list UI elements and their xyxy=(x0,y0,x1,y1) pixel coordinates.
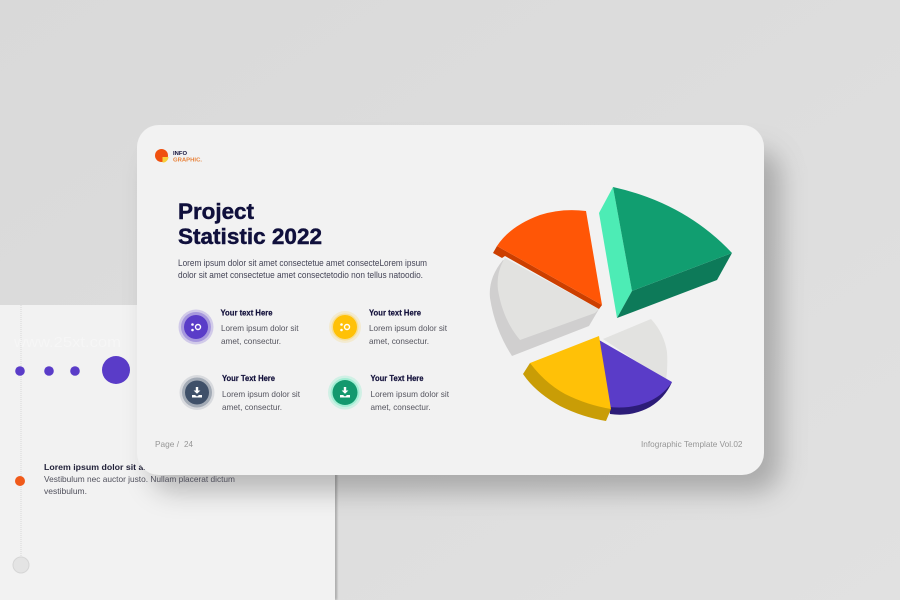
icon: green download xyxy=(328,376,362,410)
slice: green xyxy=(599,187,732,318)
item: yellow: Lorem ipsum dolor sit xyxy=(369,323,448,333)
card shadow xyxy=(150,150,780,492)
item: green: amet, consectur. xyxy=(370,402,430,412)
panel: main card xyxy=(137,125,764,475)
logo: GRAPHIC. xyxy=(173,158,203,164)
timeline description: vestibulum. xyxy=(44,486,87,496)
item: yellow: amet, consectur. xyxy=(369,336,429,346)
icon: purple gears xyxy=(178,310,214,344)
page number xyxy=(155,439,193,449)
item: green xyxy=(328,374,450,412)
slice: yellow xyxy=(523,336,611,421)
item: slate: Lorem ipsum dolor sit xyxy=(222,389,301,399)
item: green: Your Text Here xyxy=(370,374,424,383)
timeline marker orange xyxy=(15,476,25,486)
page number: Page / xyxy=(155,439,180,449)
item: yellow xyxy=(329,308,448,346)
icon: slate download xyxy=(180,375,214,410)
intro text: dolor sit amet consectetue amet consectetodio non tellus natoodio. xyxy=(178,270,423,280)
item: slate: Your Text Here xyxy=(222,374,276,383)
item: green: Lorem ipsum dolor sit xyxy=(370,389,450,399)
template label: Infographic Template Vol.02 xyxy=(641,439,743,449)
title: Project xyxy=(178,199,255,224)
title xyxy=(178,199,322,249)
item: purple: Your text Here xyxy=(220,308,273,318)
timeline description: Vestibulum nec auctor justo. Nullam placerat dictum xyxy=(44,474,235,484)
slice: grey right xyxy=(603,319,667,381)
intro text: Lorem ipsum dolor sit amet consectetue amet consecteLorem ipsum xyxy=(178,258,427,268)
item: purple: Lorem ipsum dolor sit xyxy=(221,323,299,333)
slice: purple xyxy=(599,340,672,415)
logo: INFO xyxy=(173,151,188,157)
timeline heading: Lorem ipsum dolor sit amet xyxy=(44,462,159,472)
item: yellow: Your text Here xyxy=(369,308,422,318)
panel: background slide xyxy=(0,305,337,600)
title: Statistic 2022 xyxy=(178,224,322,249)
timeline description xyxy=(44,474,235,496)
logo xyxy=(155,149,203,164)
item: purple xyxy=(178,308,299,346)
watermark: www.25xt.com xyxy=(13,334,121,351)
intro text xyxy=(178,258,427,280)
icon: yellow gears xyxy=(329,311,361,343)
slice: grey left xyxy=(490,258,599,356)
timeline dots xyxy=(15,356,130,384)
item: slate: amet, consectur. xyxy=(222,402,282,412)
page number: 24 xyxy=(184,439,193,449)
item: purple: amet, consectur. xyxy=(221,336,281,346)
slice: orange xyxy=(493,210,602,309)
item: slate xyxy=(180,374,301,412)
timeline marker grey xyxy=(13,557,29,573)
chart: exploded 3D pie xyxy=(490,187,732,421)
